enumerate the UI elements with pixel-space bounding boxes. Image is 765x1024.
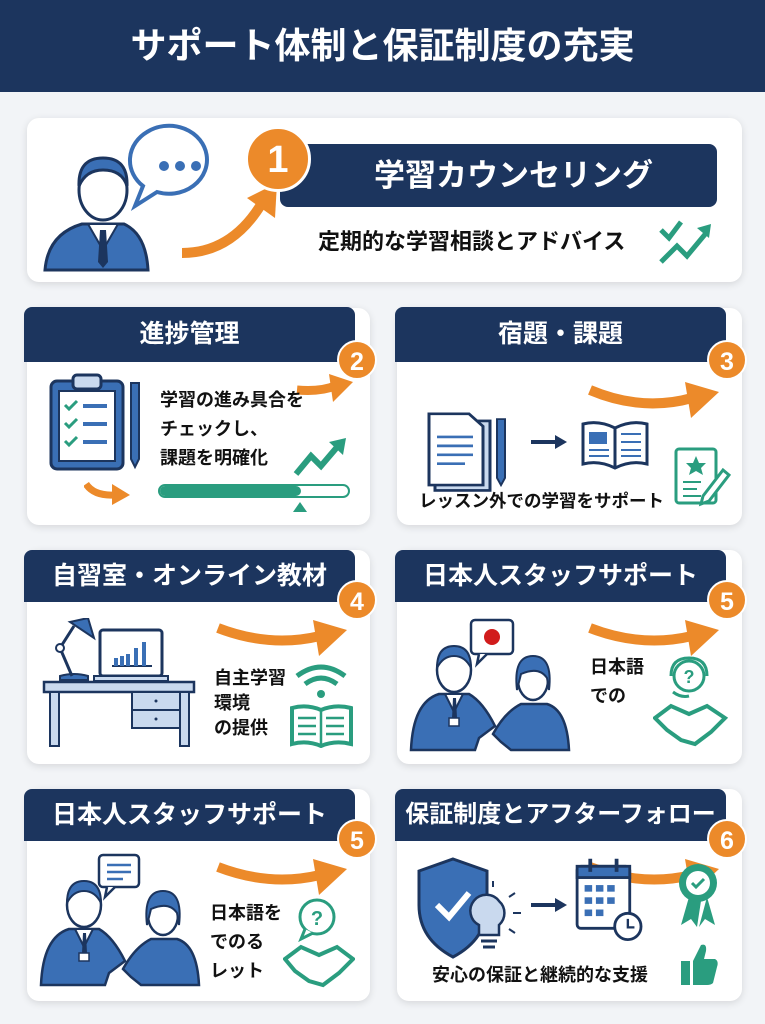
badge 6 [707,819,747,859]
icon: counselor with speech bubble [43,124,209,272]
icon: thumbs up [681,944,718,985]
arrow [592,859,719,884]
panel 5: Japanese staff support (top) [397,550,742,764]
icon: medal [679,864,717,927]
icon: wifi and book [290,664,353,748]
text: 学習の進み具合を [160,390,304,410]
icon: calendar with clock [576,858,642,941]
badge 1: 1 [267,139,289,181]
arrow [216,620,347,656]
small orange arrow [84,482,130,505]
icon: question bubble and handshake: ? [311,908,323,930]
header banner: サポート体制と保証制度の充実 [130,25,634,66]
text: レット [210,961,264,981]
icon: headset and handshake: ? [684,667,694,687]
text: 日本語 [590,657,644,677]
arrow [588,620,719,656]
heading: 保証制度とアフターフォロー [405,801,716,828]
icon: document and pen [428,412,506,492]
text: 日本語を [210,903,282,923]
arrow [531,898,567,912]
progress bar [158,484,350,498]
icon: two people shaking hands with chat bubble [40,854,200,986]
badge 4: 4 [350,588,364,616]
text: での [590,686,626,706]
text: 自主学習 [214,668,286,688]
icon: green check trend [659,220,711,264]
text: 環境 [214,693,250,713]
panel 1: counseling [27,118,742,282]
heading [395,789,726,841]
badge 4 [337,580,377,620]
text: 課題を明確化 [160,448,268,468]
arrow: doc to book [531,435,567,449]
badge 1 [245,126,311,192]
icon: clipboard and pen [50,374,140,470]
icon: headset and handshake [653,656,728,746]
heading bar: 学習カウンセリング [280,144,717,207]
text: の提供 [214,718,268,738]
heading: 日本人スタッフサポート [423,562,698,590]
heading [24,789,355,841]
heading bar: 学習カウンセリング: 学習カウンセリング [374,158,653,193]
heading [395,550,726,602]
heading: 自習室・オンライン教材 [52,562,327,590]
badge 5: 5 [720,588,734,616]
heading: 進捗管理 [139,320,240,348]
heading [24,307,355,362]
header banner [0,0,765,92]
icon: green trend [294,438,346,476]
panel 4: self-study room [27,550,370,764]
text [160,390,304,468]
icon: open book [582,421,648,470]
icon: question bubble and handshake [283,898,355,988]
text: でのる [210,932,264,952]
badge 5 [337,819,377,859]
arrow [216,859,347,895]
heading [24,550,355,602]
panel 6: guarantee and after-follow [397,789,742,1001]
badge 5 [707,580,747,620]
icon: certificate with pencil [674,448,731,506]
text [210,903,282,981]
badge 2 [337,340,377,380]
badge 2: 2 [350,348,364,376]
arrow [588,382,719,418]
arrow [296,374,353,402]
badge 6: 6 [720,827,734,855]
text: チェックし、 [160,419,268,439]
text: 安心の保証と継続的な支援 [432,965,648,985]
text: レッスン外での学習をサポート [419,491,664,511]
subtitle: 定期的な学習相談とアドバイス [318,229,625,254]
text [590,657,644,706]
heading: 宿題・課題 [498,320,623,348]
heading: 日本人スタッフサポート [52,801,327,829]
badge 3 [707,340,747,380]
icon: shield with bulb [418,857,521,959]
panel 3: homework [397,308,742,525]
panel 2: progress management [27,308,370,525]
heading [395,307,726,362]
badge 3: 3 [720,348,734,376]
arrow: orange to step 1 [182,189,276,258]
icon: two people shaking hands with Japan flag bubble [410,618,570,752]
panel 5: Japanese staff support (bottom) [27,789,370,1001]
icon: desk with laptop and lamp [42,618,196,747]
text [214,668,286,738]
badge 5: 5 [350,827,364,855]
